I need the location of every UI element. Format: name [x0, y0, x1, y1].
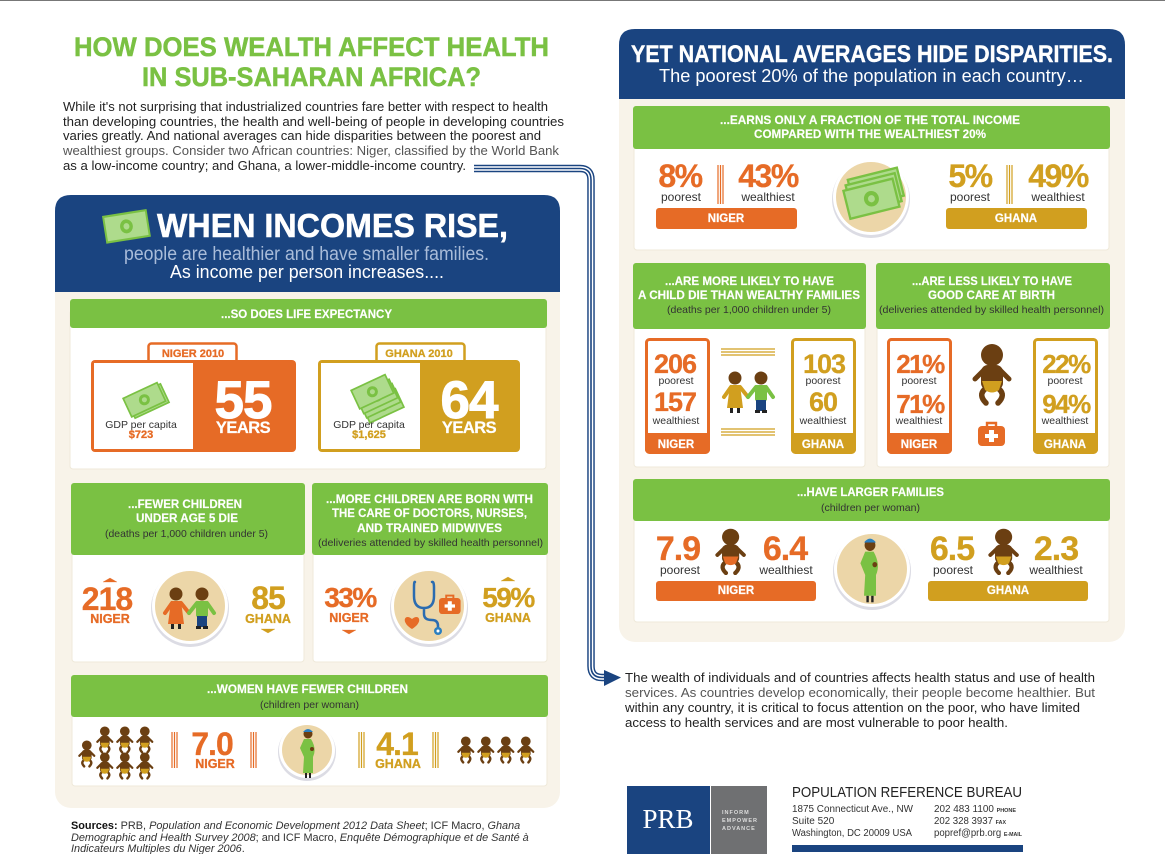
card: larger families: 6.5 [930, 530, 974, 568]
organisation contact details: 202 483 1100 PHONE [934, 804, 1016, 815]
card: fewer children die: 85 [251, 580, 285, 616]
niger 2010 box: YEARS [216, 419, 271, 437]
card: fraction of income [633, 106, 1110, 250]
card: women have fewer children: ...WOMEN HAVE FEWER CHILDREN [207, 682, 408, 696]
card: fraction of income: NIGER [708, 213, 745, 225]
icon: money in circle [832, 159, 910, 238]
card: women have fewer children: 7.0 [191, 726, 233, 762]
niger 2010 box: NIGER 2010 [162, 348, 224, 360]
card: fraction of income: 49% [1028, 158, 1089, 194]
card: more children born with care: (deliveries attended by skilled health personnel) [318, 537, 543, 549]
intro text [62, 100, 564, 173]
ghana box: 103 [803, 349, 846, 379]
card: larger families: wealthiest [758, 563, 813, 577]
card: more children born with care: 33% [324, 582, 377, 613]
title: IN SUB-SAHARAN AFRICA? [142, 62, 481, 92]
niger box: NIGER [901, 439, 938, 451]
organisation contact details [792, 784, 1023, 852]
logo: PRB [627, 786, 767, 854]
niger box: 206 [654, 349, 697, 379]
sources [71, 820, 529, 854]
niger box: NIGER [658, 439, 695, 451]
organisation contact details: 1875 Connecticut Ave., NW [792, 804, 914, 815]
card: fraction of income: 43% [738, 158, 799, 194]
panel header: when incomes rise: As income per person increases.... [170, 262, 444, 282]
ghana box: poorest [1047, 375, 1083, 387]
card: child deaths: (deaths per 1,000 children under 5) [667, 304, 831, 316]
ghana box: wealthiest [799, 415, 846, 427]
niger 2010 box [91, 344, 296, 452]
niger box [887, 340, 952, 453]
card: fraction of income: poorest [661, 190, 702, 204]
card: women have fewer children: GHANA [375, 757, 421, 771]
card: care at birth: GOOD CARE AT BIRTH [928, 288, 1055, 302]
arrow: connector from intro to conclusion [474, 168, 621, 686]
card: care at birth: ...ARE LESS LIKELY TO HAVE [912, 274, 1072, 288]
panel header: when incomes rise [55, 195, 560, 292]
icon: medical kit [978, 423, 1005, 446]
card: larger families: poorest [933, 563, 974, 577]
panel header: disparities: YET NATIONAL AVERAGES HIDE DISPARITIES. [631, 41, 1113, 68]
logo: PRB: PRB [642, 804, 694, 834]
icon: baby [975, 344, 1009, 403]
sources: Sources: PRB, Population and Economic Development 2012 Data Sheet; ICF Macro, Ghana [71, 820, 520, 832]
card: larger families: GHANA [987, 585, 1029, 597]
card: fraction of income: COMPARED WITH THE WEALTHIEST 20% [754, 127, 986, 141]
ghana box: 22% [1042, 349, 1091, 379]
logo: PRB: ADVANCE [722, 826, 756, 832]
card: more children born with care: AND TRAINED MIDWIVES [357, 521, 502, 535]
title [74, 32, 549, 92]
card: women have fewer children: NIGER [195, 757, 235, 771]
niger box: 157 [654, 387, 696, 417]
intro text: than developing countries, the health and well-being of people in developing countries [63, 115, 564, 129]
niger box: wealthiest [895, 415, 942, 427]
card: larger families: 7.9 [656, 530, 700, 568]
logo: PRB: INFORM [722, 810, 750, 816]
card: fraction of income: wealthiest [1030, 190, 1085, 204]
niger 2010 box: 55 [215, 371, 271, 430]
niger box: 21% [896, 349, 945, 379]
organisation contact details: Washington, DC 20009 USA [792, 828, 912, 839]
card: more children born with care: GHANA [485, 611, 531, 625]
organisation contact details: popref@prb.org E-MAIL [934, 828, 1023, 839]
card: larger families: NIGER [718, 585, 755, 597]
card: fraction of income: 5% [948, 158, 993, 194]
card: fewer children die: ...FEWER CHILDREN [128, 497, 242, 511]
ghana 2010 box: 64 [441, 371, 499, 430]
card: fraction of income: wealthiest [740, 190, 795, 204]
ghana 2010 box: YEARS [442, 419, 497, 437]
icon: woman in circle [833, 531, 911, 610]
card: fewer children die: NIGER [90, 612, 130, 626]
conclusion text: services. As countries develop economically, their people become healthier. But [625, 686, 1095, 700]
icon: woman in circle [278, 722, 336, 781]
card: larger families: (children per woman) [821, 502, 920, 514]
card: child deaths: ...ARE MORE LIKELY TO HAVE [665, 274, 834, 288]
icon: children [724, 372, 773, 413]
ghana box [791, 340, 856, 453]
panel header: when incomes rise: WHEN INCOMES RISE, [157, 207, 508, 244]
card: larger families: ...HAVE LARGER FAMILIES [797, 485, 944, 499]
card: more children born with care: ...MORE CHILDREN ARE BORN WITH [326, 492, 533, 506]
niger box: poorest [658, 375, 694, 387]
panel header: disparities: The poorest 20% of the population in each country… [659, 66, 1084, 86]
card: larger families [633, 479, 1110, 622]
conclusion text: access to health services and are most vulnerable to poor health. [625, 716, 1008, 730]
card: life expectancy [70, 299, 547, 469]
card: larger families: poorest [660, 563, 701, 577]
logo: PRB: EMPOWER [722, 818, 758, 824]
icon: children in circle [151, 568, 229, 647]
panel header: when incomes rise: people are healthier and have smaller families. [124, 244, 489, 265]
organisation contact details: Suite 520 [792, 816, 835, 827]
card: fraction of income: ...EARNS ONLY A FRACTION OF THE TOTAL INCOME [720, 113, 1020, 127]
title: HOW DOES WEALTH AFFECT HEALTH [74, 32, 549, 62]
niger box: wealthiest [652, 415, 699, 427]
card: larger families: wealthiest [1028, 563, 1083, 577]
conclusion text: The wealth of individuals and of countries affects health status and use of health [625, 671, 1095, 685]
card: fraction of income: 8% [658, 158, 703, 194]
icon: seven babies [79, 726, 152, 778]
card: larger families: 6.4 [763, 530, 808, 568]
card: fewer children die: GHANA [245, 612, 291, 626]
card: life expectancy: ...SO DOES LIFE EXPECTANCY [221, 307, 392, 321]
card: child deaths [633, 263, 866, 467]
panel: national averages hide disparities [619, 29, 1125, 642]
ghana box: GHANA [802, 439, 844, 451]
niger 2010 box: GDP per capita [105, 419, 177, 431]
ghana box: GHANA [1044, 439, 1086, 451]
niger box [645, 340, 710, 453]
ghana box: wealthiest [1041, 415, 1088, 427]
ghana box: poorest [805, 375, 841, 387]
card: care at birth [876, 263, 1110, 467]
ghana 2010 box: $1,625 [352, 429, 386, 441]
ghana 2010 box: GDP per capita [333, 419, 405, 431]
niger box: 71% [896, 389, 945, 419]
sources: Demographic and Health Survey 2008; and ICF Macro, Enquête Démographique et de Santé à [71, 832, 529, 844]
ghana box: 60 [809, 387, 837, 417]
ghana box: 94% [1042, 389, 1091, 419]
card: fewer children die: (deaths per 1,000 children under 5) [105, 528, 268, 540]
card: women have fewer children: 4.1 [376, 726, 418, 762]
conclusion text [624, 671, 1095, 730]
card: fewer children die: 218 [82, 581, 132, 617]
card: child deaths: A CHILD DIE THAN WEALTHY FAMILIES [638, 288, 860, 302]
card: care at birth: (deliveries attended by skilled health personnel) [879, 304, 1104, 316]
card: fraction of income: poorest [950, 190, 991, 204]
card: more children born with care: 59% [482, 582, 535, 613]
niger box: poorest [901, 375, 937, 387]
card: more children born with care: NIGER [329, 611, 369, 625]
card: women have fewer children [71, 675, 548, 786]
card: fewer children die: UNDER AGE 5 DIE [136, 511, 238, 525]
card: fraction of income: GHANA [995, 213, 1037, 225]
icon: four babies [458, 736, 533, 762]
top rule [0, 0, 1165, 1]
organisation contact details: POPULATION REFERENCE BUREAU [792, 784, 1022, 801]
ghana box [1033, 340, 1098, 453]
card: fewer children die [71, 483, 305, 662]
intro text: wealthiest groups. Consider two African countries: Niger, classified by the World Bank [62, 144, 560, 158]
conclusion text: within any country, it is critical to focus attention on the poor, who have limited [624, 701, 1080, 715]
card: larger families: 2.3 [1034, 530, 1078, 568]
intro text: varies greatly. And national averages can hide disparities between the poorest and [63, 129, 541, 143]
organisation contact details: 202 328 3937 FAX [934, 816, 1006, 827]
ghana 2010 box: GHANA 2010 [385, 348, 453, 360]
card: more children born with care: THE CARE OF DOCTORS, NURSES, [332, 506, 527, 520]
intro text: While it's not surprising that industrialized countries fare better with respect to health [63, 100, 548, 114]
icon: stethoscope in circle [390, 568, 468, 647]
intro text: as a low-income country; and Ghana, a lower-middle-income country. [63, 159, 466, 173]
ghana 2010 box [318, 344, 520, 452]
card: more children born with care [312, 483, 548, 662]
niger 2010 box: $723 [129, 429, 153, 441]
panel: when incomes rise [55, 195, 560, 808]
panel header: disparities [619, 29, 1125, 99]
card: women have fewer children: (children per woman) [260, 699, 359, 711]
